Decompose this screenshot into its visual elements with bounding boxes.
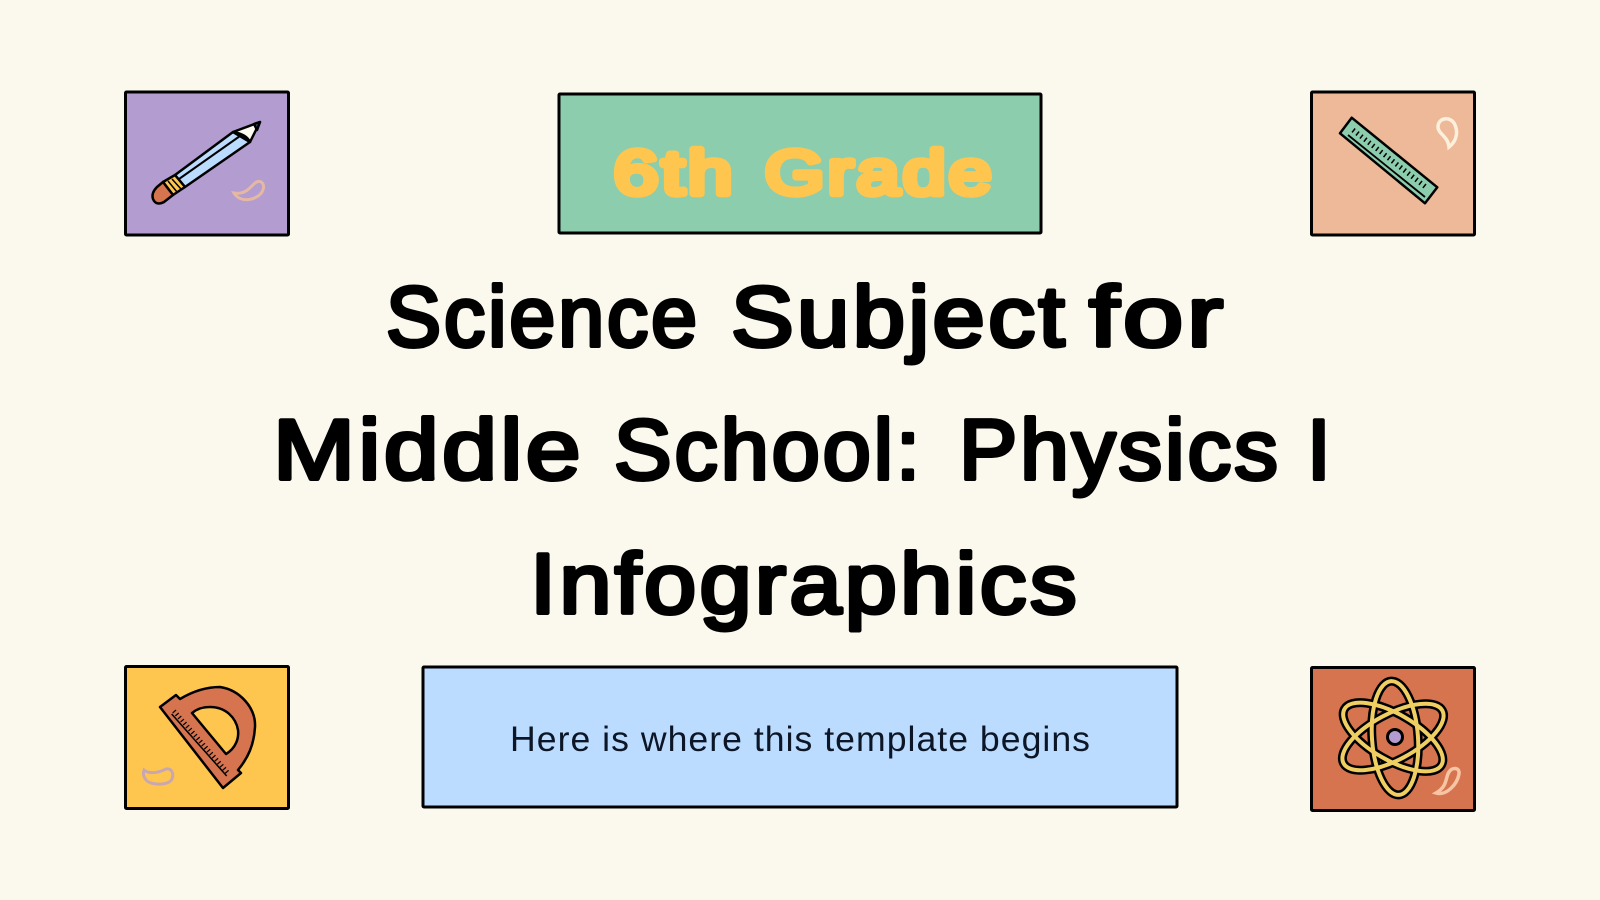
icon: protractor [160,687,255,788]
heading: 6th Grade: 6th [614,139,736,208]
panel: atom tile [1312,668,1474,810]
subtitle text: Here is where this template begins [510,720,1091,759]
icon: paisley doodle [1436,768,1459,794]
icon: ruler [1340,118,1437,203]
panel: ruler tile [1312,92,1474,235]
icon: pencil [152,122,260,203]
panel: protractor tile [126,666,288,808]
title: School: [614,403,923,498]
panel: pencil tile [126,92,288,235]
title: for [1089,270,1227,365]
title: I [1307,403,1334,498]
icon: atom [1333,680,1453,796]
panel: grade label [559,94,1041,233]
title [273,270,1334,632]
title: Subject [731,270,1068,365]
panel: subtitle [423,667,1177,807]
icon: paisley doodle [234,181,264,200]
title: Science [386,270,700,365]
heading: 6th Grade: Grade [765,139,995,208]
title: Infographics [530,537,1080,632]
icon: paisley doodle [1438,119,1457,147]
icon: paisley doodle [143,769,173,784]
title: Middle [273,403,584,498]
title: Physics [959,403,1281,498]
